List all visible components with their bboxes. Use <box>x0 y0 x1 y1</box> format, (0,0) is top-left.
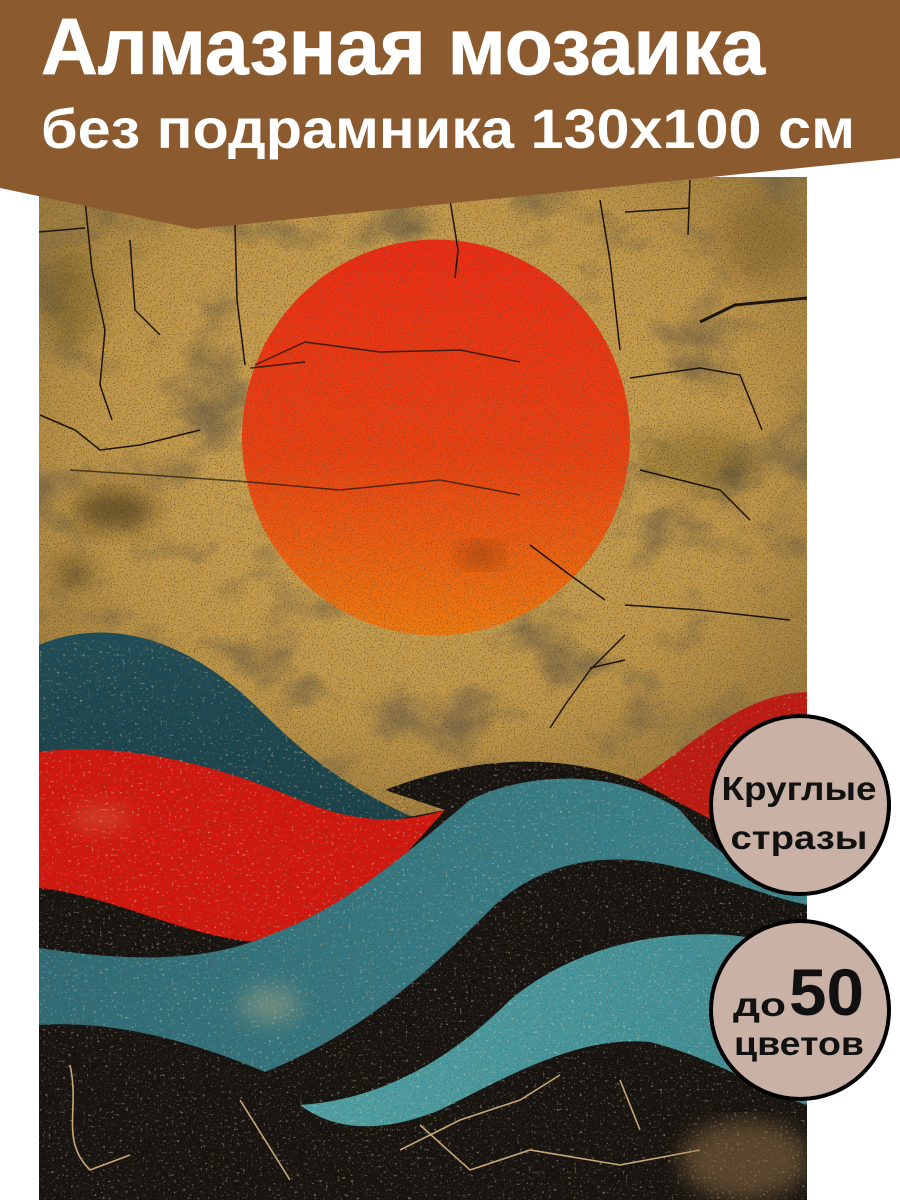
top banner <box>0 0 900 229</box>
badge: up to 50 colours <box>711 921 889 1099</box>
title: Алмазная мозаика <box>41 2 765 91</box>
dark blotches on wall <box>40 200 800 583</box>
badge: round rhinestones: Круглые <box>722 770 876 807</box>
painting background: cracked ochre wall <box>39 177 807 817</box>
black wave back <box>39 762 807 1200</box>
subtitle: без подрамника 130х100 см <box>41 97 855 160</box>
badge: up to 50 colours: 50 <box>789 955 864 1029</box>
dark teal wave <box>39 633 430 880</box>
wave texture and gold flecks <box>39 640 807 1200</box>
red wave left <box>39 749 445 942</box>
painting: abstract sun over waves <box>39 177 810 1200</box>
badge: round rhinestones <box>711 716 889 894</box>
badge: round rhinestones: стразы <box>730 819 868 856</box>
badge: up to 50 colours: цветов <box>734 1025 864 1062</box>
wall cracks <box>39 180 807 728</box>
gold flecks patches <box>70 810 300 1023</box>
red sun <box>240 238 632 638</box>
gold cracks in foreground <box>70 1065 700 1180</box>
badge: up to 50 colours: до <box>733 986 786 1023</box>
gold patch bottom right <box>680 1120 810 1200</box>
red wave right <box>620 692 807 860</box>
teal wave large <box>39 779 807 1072</box>
light teal wave <box>300 934 807 1126</box>
